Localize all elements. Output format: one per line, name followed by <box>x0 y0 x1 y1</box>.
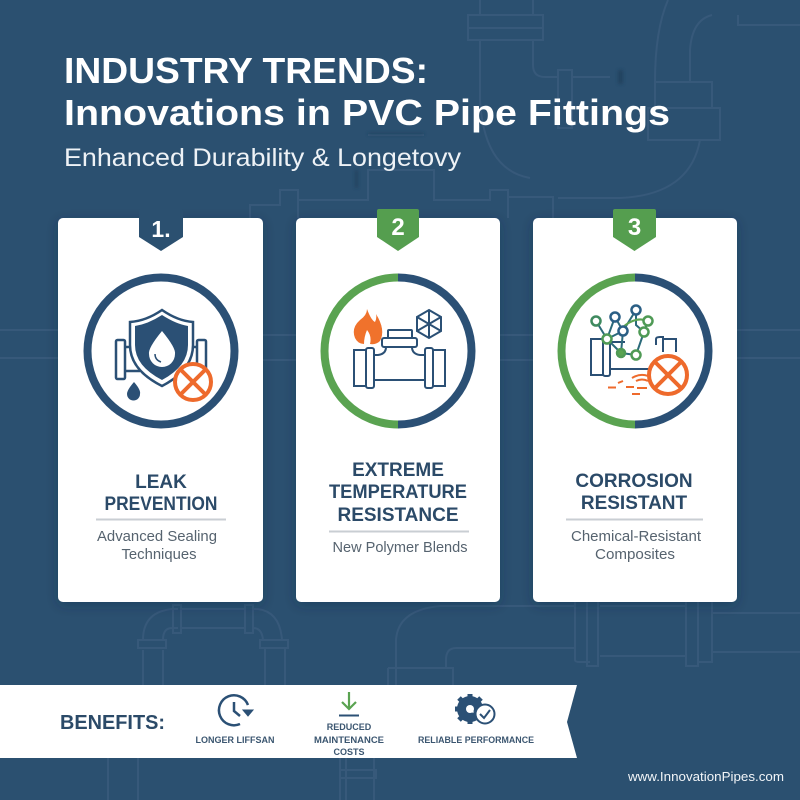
banner background <box>0 685 577 758</box>
number badge 2 <box>377 209 419 251</box>
heading: RESISTANT <box>581 493 688 514</box>
heading <box>575 471 693 514</box>
benefit: reliable performance <box>418 694 534 745</box>
number badge 3: 3 <box>628 214 641 241</box>
benefits label: BENEFITS: <box>60 712 165 734</box>
card background <box>296 218 500 602</box>
description: Techniques <box>122 546 196 563</box>
heading: RESISTANCE <box>337 505 459 526</box>
icon: molecule, corroded pipe and warning <box>591 306 687 394</box>
background smudges <box>355 70 623 188</box>
two-tone ring <box>562 278 708 424</box>
panel: corrosion resistant <box>533 209 737 602</box>
description: New Polymer Blends <box>332 540 468 556</box>
title <box>64 50 670 133</box>
number badge 2: 2 <box>391 214 405 241</box>
number badge 3 <box>613 209 656 251</box>
benefit: reduced maintenance costs <box>314 692 384 757</box>
description: Composites <box>595 546 675 563</box>
panel: extreme temperature resistance <box>296 209 500 602</box>
title: Innovations in PVC Pipe Fittings <box>64 92 670 133</box>
benefit: reduced maintenance costs: COSTS <box>333 747 365 757</box>
card background <box>58 218 263 602</box>
website url: www.InnovationPipes.com <box>627 769 784 784</box>
heading: PREVENTION <box>104 494 218 515</box>
icon: shield with water drop and pipe <box>116 310 211 400</box>
card background <box>533 218 737 602</box>
benefit: longer lifespan: LONGER LIFFSAN <box>196 735 274 745</box>
heading: CORROSION <box>575 471 693 492</box>
description: Chemical-Resistant <box>571 528 702 545</box>
two-tone ring <box>324 278 472 424</box>
heading: LEAK <box>135 472 187 493</box>
ring <box>88 278 234 424</box>
number badge 1: 1. <box>151 216 171 242</box>
benefit: reliable performance: RELIABLE PERFORMANCE <box>418 735 534 745</box>
heading <box>329 460 467 526</box>
benefit: reduced maintenance costs: MAINTENANCE <box>314 735 384 745</box>
description <box>97 528 217 563</box>
benefit: reduced maintenance costs: REDUCED <box>327 722 372 732</box>
heading <box>104 472 218 515</box>
icon: flame, snowflake and pipe fitting <box>354 309 445 388</box>
title: INDUSTRY TRENDS: <box>64 50 428 91</box>
panel: benefits banner <box>0 685 577 758</box>
heading: TEMPERATURE <box>329 482 467 503</box>
description <box>571 528 702 563</box>
heading: EXTREME <box>352 460 444 481</box>
number badge 1 <box>139 209 183 251</box>
description: Advanced Sealing <box>97 528 217 545</box>
panel: leak prevention <box>58 209 263 602</box>
subtitle: Enhanced Durability & Longetovy <box>64 144 462 172</box>
benefit: longer lifespan <box>196 695 274 745</box>
